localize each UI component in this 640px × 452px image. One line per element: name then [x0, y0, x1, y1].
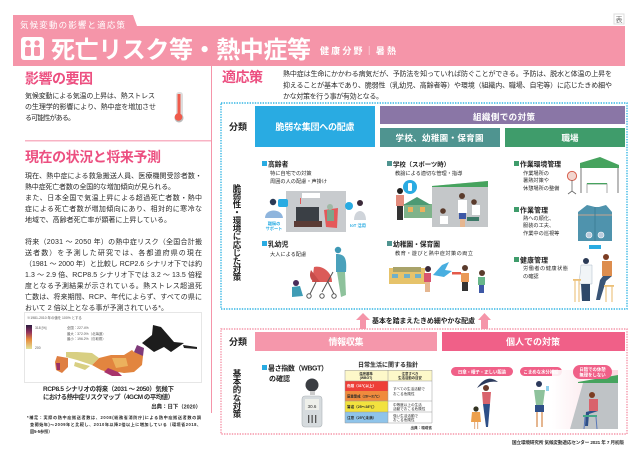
map legend: 318 [%]	[35, 326, 47, 330]
illustration: elderly at home with AC: 離隔の	[268, 220, 280, 227]
icon: people	[21, 37, 44, 60]
status body text: 熱中症死亡者数の全国的な増加傾向が見られる。	[25, 182, 175, 191]
pill: no strenuous work in shade	[573, 365, 612, 379]
block: health management: 健康管理	[520, 256, 548, 264]
header: individual measures: 個人での対策	[506, 336, 560, 347]
block: work environment: 休憩場所の整備	[523, 184, 559, 192]
causes body text: の生理学的影響により、熱中症を増加させ	[25, 102, 156, 111]
section rule	[25, 140, 211, 142]
pill: no strenuous work in shade: 無理をしない	[579, 372, 606, 378]
block: infants: 乳幼児	[268, 240, 289, 248]
block: health management: の確認	[523, 272, 539, 280]
chart: Japan heatstroke risk map	[24, 312, 202, 382]
status body text: おいて 2 倍以上となる事が予測されている*。	[25, 303, 168, 312]
WBGT block: の確認	[269, 374, 290, 383]
table: daily life guideline: 生活活動の目安	[398, 375, 422, 380]
map legend: 200	[35, 346, 41, 350]
footnote: 図5-5参照）	[30, 428, 52, 434]
map legend: 全国：227.4%	[67, 325, 89, 330]
block: health management: 労働者の健康状態	[523, 264, 568, 272]
table: daily life guideline: おこる危険性	[393, 417, 415, 422]
illustration: air conditioned jacket	[578, 205, 612, 249]
map legend: 最小：196.2%（鳥取県）	[67, 336, 106, 341]
panel: adaptation heading: 適応策	[222, 69, 263, 85]
illustration: kids with water guns	[389, 262, 485, 293]
block: work environment: 作業環境管理	[520, 160, 561, 168]
icon: WBGT meter: 30.6	[308, 404, 317, 409]
adaptation intro text	[283, 69, 612, 100]
block: work environment: 作業場所の	[523, 169, 549, 177]
block: work management: 作業管理	[520, 206, 548, 214]
header: workplace	[505, 128, 625, 147]
category label: 分類	[229, 336, 247, 347]
vertical label: 基本的な対策	[232, 368, 242, 419]
table: daily life guideline: 中等度以上の生活	[393, 402, 422, 407]
map regions	[55, 325, 197, 376]
block: nursery: 教育・遊びと熱中症対策の両立	[395, 249, 473, 257]
pill: parasol hat clothing: 日傘・帽子・正しい服装	[458, 368, 507, 376]
table: daily life guideline: (WBGT)	[360, 376, 372, 380]
block: work management: 作業中の巡視等	[523, 229, 559, 237]
illustration: school and students	[396, 180, 488, 227]
table: daily life guideline: 温度基準	[359, 371, 373, 376]
header: organisation measures	[380, 106, 625, 124]
main title: 死亡リスク等・熱中症等	[51, 37, 311, 64]
status body text	[25, 171, 202, 312]
table: daily life guideline: 強い生活活動で	[393, 413, 419, 418]
table: daily life guideline: 厳重警戒（28～31℃）	[347, 394, 382, 398]
panel: current status and projection	[25, 149, 202, 312]
page label tag: 表	[616, 15, 622, 24]
map caption: における熱中症リスクマップ（4GCM の平均値）	[43, 392, 174, 401]
status body text: 度となる予測結果が示されている。熱ストレス超過死	[25, 281, 202, 290]
pill: regular hydration: こまめな水分補給	[523, 368, 559, 376]
chart: Japan heatstroke risk map: ※1981-2010 年の値を 100% とする	[27, 315, 82, 320]
footnote: 査開始年)～2009年と比較し、2010年以降2倍以上に増加している（環境省2018、	[30, 421, 201, 427]
header: information gathering: 情報収集	[328, 336, 364, 347]
arrow note: 基本を踏まえたきめ細やかな配慮	[372, 316, 475, 325]
causes body text	[25, 91, 156, 122]
pill: no strenuous work in shade: 日陰での休憩	[579, 366, 606, 373]
block: work environment	[514, 157, 619, 194]
table: daily life guideline: 危険（31℃以上）	[347, 383, 376, 388]
header: organisation measures: 組織側での対策	[473, 112, 535, 122]
status body text: （1981 ～ 2000 年）と比較し RCP2.6 シナリオ下では約	[25, 259, 202, 268]
block: school	[387, 160, 488, 227]
adaptation intro text: かな対策を行う事が有効となる。	[283, 92, 383, 100]
table: daily life guideline: おこる危険性	[393, 391, 415, 396]
table: daily life guideline: すべての生活活動で	[393, 386, 425, 391]
causes body text: 気候変動による気温の上昇は、熱ストレス	[25, 91, 155, 100]
block: infants: 大人による配慮	[270, 250, 306, 258]
map caption	[43, 384, 175, 401]
header: schools	[380, 128, 500, 147]
block: nursery: 幼稚園・保育園	[393, 240, 440, 248]
block: elderly: 特に自宅での対策	[270, 169, 312, 177]
header: information gathering	[255, 332, 437, 351]
map source: 出典：日下（2020）	[151, 402, 201, 410]
block: school: 学校（スポーツ時）	[393, 160, 450, 168]
block: infants	[262, 240, 346, 298]
panel: current status and projection: 現在の状況と将来予測	[25, 149, 161, 165]
panel: causes of impact: 影響の要因	[25, 70, 93, 86]
header: workplace: 職場	[561, 133, 579, 143]
status body text: 現在、熱中症による救急搬送人員、医療機関受診者数・	[25, 171, 202, 180]
arrow: left up	[356, 313, 370, 329]
table: daily life guideline: 警戒（25～28℃）	[347, 404, 377, 409]
status body text: 将来（2031 ～ 2050 年）の熱中症リスク（全国合計搬	[25, 237, 202, 246]
footnote	[27, 414, 201, 434]
map caption: RCP8.5 シナリオの将来（2031 ～ 2050）気候下	[43, 384, 175, 393]
block: elderly	[262, 160, 366, 232]
footnote: *補足：実際の熱中症搬送者数は、2008(総務省消防庁)による熱中症搬送者数の調	[27, 414, 201, 420]
block: work environment: 暑熱対策や	[523, 176, 549, 184]
table: daily life guideline: 日常生活に関する指針	[358, 361, 418, 369]
illustration: doctor and worker	[573, 254, 614, 302]
panel: vulnerability and environment measures	[221, 103, 627, 309]
table: daily life guideline: 活動でおこる危険性	[393, 406, 426, 411]
map legend: 最大：372.0%（北海道）	[67, 331, 106, 336]
column divider	[211, 66, 212, 413]
WBGT block	[262, 364, 328, 427]
illustration: elderly at home with AC: IoT 活用	[350, 222, 366, 229]
arrow: right up	[478, 313, 491, 329]
block: work management: 服装の工夫、	[523, 221, 554, 229]
header banner	[13, 15, 625, 66]
header: schools: 学校、幼稚園・保育園	[396, 133, 484, 143]
topic tag: 健康分野｜暑熱	[320, 45, 396, 56]
illustration: man drinking water	[534, 381, 549, 427]
block: work management	[514, 205, 612, 249]
illustration: elderly at home with AC	[265, 191, 366, 232]
status body text: 送者数）を予測した研究では、各都道府県の現在	[25, 248, 202, 257]
status body text: 1.3 ～ 2.9 倍、RCP8.5 シナリオ下では 3.2 ～ 13.5 倍程	[25, 270, 202, 279]
vertical label: 脆弱性・環境に応じた対策	[232, 183, 242, 282]
adaptation intro text: 抑えることが基本であり、脆弱性（乳幼児、高齢者等）や環境（組織内、職場、自宅等）に応じたきめ細や	[283, 80, 612, 90]
status body text: 亡数は、将来期間、RCP、年代によらず、すべての県に	[25, 292, 202, 301]
header: individual measures	[442, 332, 625, 351]
table: daily life guideline	[345, 361, 432, 430]
block: elderly: 高齢者	[268, 160, 289, 168]
causes body text: る可能性がある。	[25, 113, 75, 122]
illustration: shade tent and fan	[567, 157, 619, 194]
WBGT block: 暑さ指数（WBGT）	[268, 364, 328, 372]
block: work management: 熱への順化、	[523, 214, 554, 222]
banner subtitle: 気候変動の影響と適応策	[20, 20, 125, 30]
status body text: 地域で、高齢者死亡率が顕著に上昇している。	[25, 215, 171, 224]
illustration: resting in shade	[552, 370, 618, 429]
pill: regular hydration	[520, 367, 562, 376]
illustration: elderly at home with AC: サポート	[266, 225, 282, 232]
panel: causes of impact	[25, 70, 184, 122]
illustration: mother with stroller	[292, 247, 346, 298]
category label: 分類	[229, 121, 247, 132]
block: health management	[514, 254, 614, 302]
header: vulnerable groups	[255, 106, 375, 147]
block: school: 教諭による適切な管理・指導	[395, 169, 462, 177]
panel: basic measures	[221, 329, 627, 434]
table: daily life guideline: 出典：環境省	[410, 425, 432, 430]
status body text: 症による死亡者数が増加傾向にあり、相対的に寒冷な	[25, 204, 202, 213]
status body text: また、日本全国で気温上昇による超過死亡者数・熱中	[25, 193, 202, 202]
page label tag	[614, 14, 624, 24]
pill: parasol hat clothing	[451, 367, 513, 376]
header: vulnerable groups: 脆弱な集団への配慮	[276, 121, 354, 132]
block: nursery	[387, 240, 485, 293]
table: daily life guideline: 注意（25℃未満）	[347, 415, 376, 420]
footer credit: 国立環境研究所 気候変動適応センター 2021 年 7 月初版	[512, 439, 624, 446]
illustration: mother and child with parasol	[471, 379, 498, 429]
adaptation intro text: 熱中症は生命にかかわる病気だが、予防法を知っていれば防ぐことができる。予防は、脱水と体温の上昇を	[283, 69, 612, 78]
table: daily life guideline: 注意すべき	[402, 371, 418, 376]
icon: thermometer	[174, 92, 184, 122]
map legend	[26, 325, 106, 350]
block: elderly: 周囲の人の配慮・声掛け	[270, 177, 327, 185]
